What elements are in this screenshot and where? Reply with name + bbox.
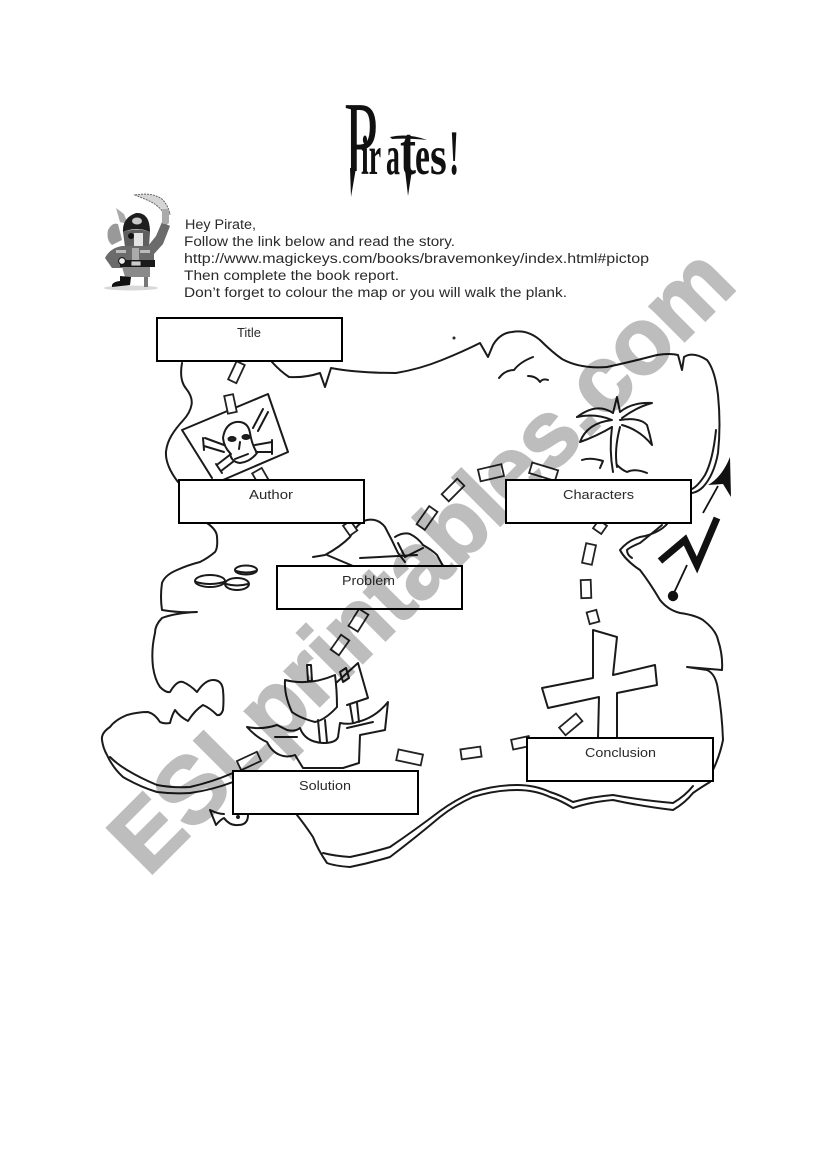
- treasure trail dashes: [224, 361, 607, 770]
- box: Conclusion: Conclusion: [585, 746, 656, 760]
- icon: pirate illustration: [104, 194, 170, 290]
- title: s: [430, 125, 447, 186]
- coins: [195, 566, 257, 590]
- intro text block: Don’t forget to colour the map or you will walk the plank.: [184, 285, 567, 300]
- box: Conclusion: [527, 738, 713, 781]
- treasure X cross: [542, 630, 657, 738]
- box: Title: [157, 318, 342, 361]
- title: [346, 105, 457, 197]
- palm tree: [577, 397, 652, 473]
- treasure map: [102, 331, 731, 867]
- box: Author: Author: [249, 488, 293, 502]
- box: Characters: [506, 480, 691, 523]
- pirate flag with skull: [182, 394, 288, 480]
- intro text block: Follow the link below and read the story.: [184, 234, 455, 249]
- watermark: ESLprintables.com: [88, 227, 753, 892]
- box: Problem: [277, 566, 462, 609]
- title: t: [400, 112, 416, 189]
- title: !: [449, 117, 459, 188]
- ship: [247, 663, 388, 768]
- box: Characters: Characters: [563, 488, 634, 502]
- mountains: [313, 520, 443, 566]
- intro text block: Then complete the book report.: [184, 268, 399, 283]
- box: Problem: Problem: [342, 574, 395, 588]
- birds: [499, 357, 548, 382]
- box: Title: Title: [237, 326, 261, 340]
- intro text block: Hey Pirate,: [185, 217, 256, 232]
- box: Solution: [233, 771, 418, 814]
- box: Solution: Solution: [299, 779, 351, 793]
- box: Author: [179, 480, 364, 523]
- map coastline: [102, 331, 723, 867]
- compass: [660, 457, 731, 601]
- intro text block: http://www.magickeys.com/books/bravemonkey/index.html#pictop: [184, 251, 649, 266]
- intro text block: [184, 217, 649, 300]
- title: ir: [361, 126, 381, 187]
- title: e: [415, 124, 430, 186]
- title: a: [386, 126, 400, 187]
- title: P: [344, 80, 378, 203]
